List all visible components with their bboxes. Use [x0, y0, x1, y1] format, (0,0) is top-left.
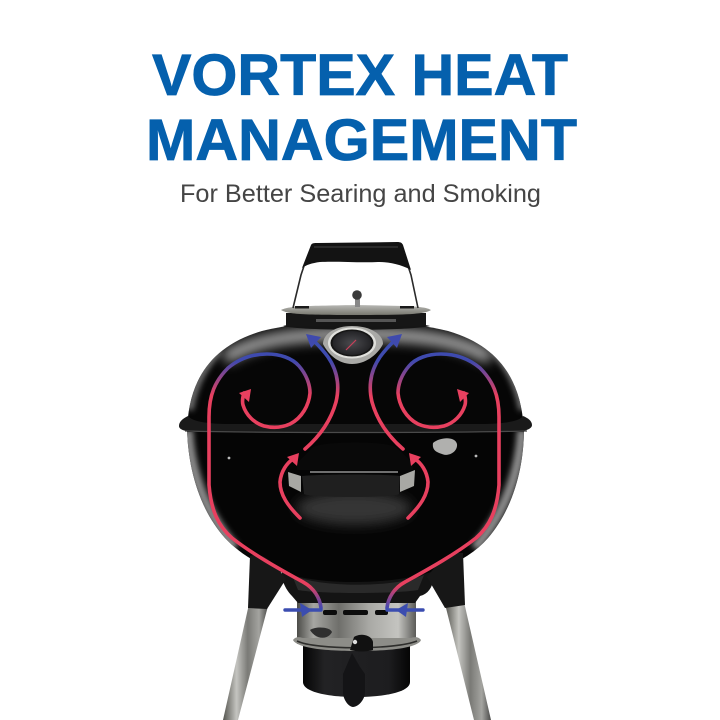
thermometer gauge: [323, 326, 383, 364]
heat shield plate: [281, 305, 431, 315]
left leg bracket: [248, 555, 286, 609]
infographic canvas: [150, 54, 577, 720]
arrow: right inner rising flow: [370, 341, 403, 449]
top vent knob: [352, 290, 362, 307]
subtitle: For Better Searing and Smoking: [180, 180, 541, 208]
vent ring: [293, 598, 421, 652]
arrow: left outer airflow spiral: [209, 354, 321, 608]
dome lid: [187, 322, 524, 432]
title: [146, 43, 577, 173]
right leg bracket: [427, 553, 465, 608]
underside below bowl: [282, 565, 434, 603]
lid rim: [179, 416, 532, 432]
arrow: right handle flow: [408, 459, 428, 518]
lid top collar: [283, 313, 430, 330]
right leg: [445, 602, 491, 720]
blue intake arrows: [285, 608, 423, 612]
title: VORTEX HEAT: [152, 43, 568, 108]
arrowheads: [239, 334, 469, 466]
ash catcher cup: [303, 642, 410, 707]
left leg: [223, 604, 268, 720]
illustration: kettle grill: [179, 242, 532, 720]
arrow: left inner rising flow: [305, 341, 338, 449]
title: MANAGEMENT: [146, 108, 577, 173]
arrow: right outer airflow spiral: [387, 354, 499, 608]
front handle: [288, 442, 415, 497]
arrow: left handle flow: [280, 459, 300, 518]
lower bowl: [187, 428, 524, 582]
heat flow arrows: [209, 341, 499, 608]
carry handle: [293, 242, 418, 308]
vent button on bowl: [433, 438, 457, 455]
